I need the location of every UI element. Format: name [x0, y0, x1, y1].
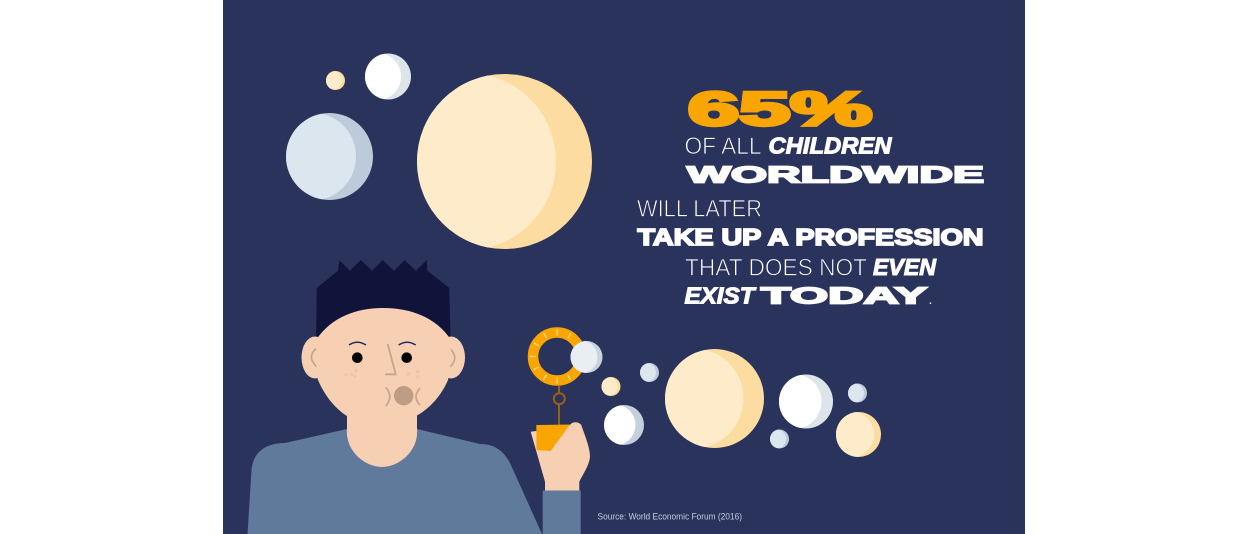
line: take up a profession: TAKE UP A PROFESSION [638, 224, 984, 250]
small blue bubble [640, 363, 659, 382]
boy figure [248, 260, 590, 534]
lower bubbles row [564, 340, 881, 458]
white bubble [604, 405, 644, 445]
headline text block [637, 82, 984, 308]
statistic 65%: 65% [688, 82, 872, 135]
line: exist today: . [928, 291, 932, 307]
line: of all children: OF ALL [684, 133, 762, 160]
sleeve [543, 490, 581, 534]
small cream bubble [326, 71, 345, 90]
hand [531, 422, 590, 490]
white bubble right [779, 374, 833, 428]
medium cream bubble [665, 349, 764, 448]
eyes and brows [349, 342, 416, 363]
bubble on wand [570, 341, 602, 373]
freckles [344, 369, 420, 378]
small blue bubble lower [770, 430, 789, 448]
ears [302, 336, 465, 378]
pale blue bubble [286, 113, 373, 200]
line: exist today: EXIST [684, 282, 756, 308]
line: worldwide: WORLDWIDE [687, 162, 984, 188]
neck [347, 405, 417, 467]
source note: Source: World Economic Forum (2016) [598, 512, 742, 522]
head [316, 308, 451, 416]
line: of all children [684, 132, 893, 160]
large cream bubble [417, 74, 592, 249]
line: of all children: CHILDREN [768, 132, 893, 158]
line: will later: WILL LATER [637, 196, 762, 222]
blowing mouth [386, 386, 420, 406]
small blue bubble right [848, 384, 867, 402]
background panel [223, 0, 1025, 534]
line: that does not even: THAT DOES NOT [685, 254, 867, 282]
line: exist today: TODAY [761, 282, 928, 308]
bubble wand [533, 332, 581, 451]
line: exist today [684, 282, 932, 308]
cream bubble right [836, 412, 881, 457]
nose [385, 344, 396, 374]
torso [248, 429, 542, 534]
hair [316, 260, 451, 345]
line: that does not even: EVEN [873, 254, 937, 280]
white bubble [365, 54, 411, 100]
small cream bubble [602, 377, 620, 396]
upper bubbles cluster [268, 53, 592, 250]
